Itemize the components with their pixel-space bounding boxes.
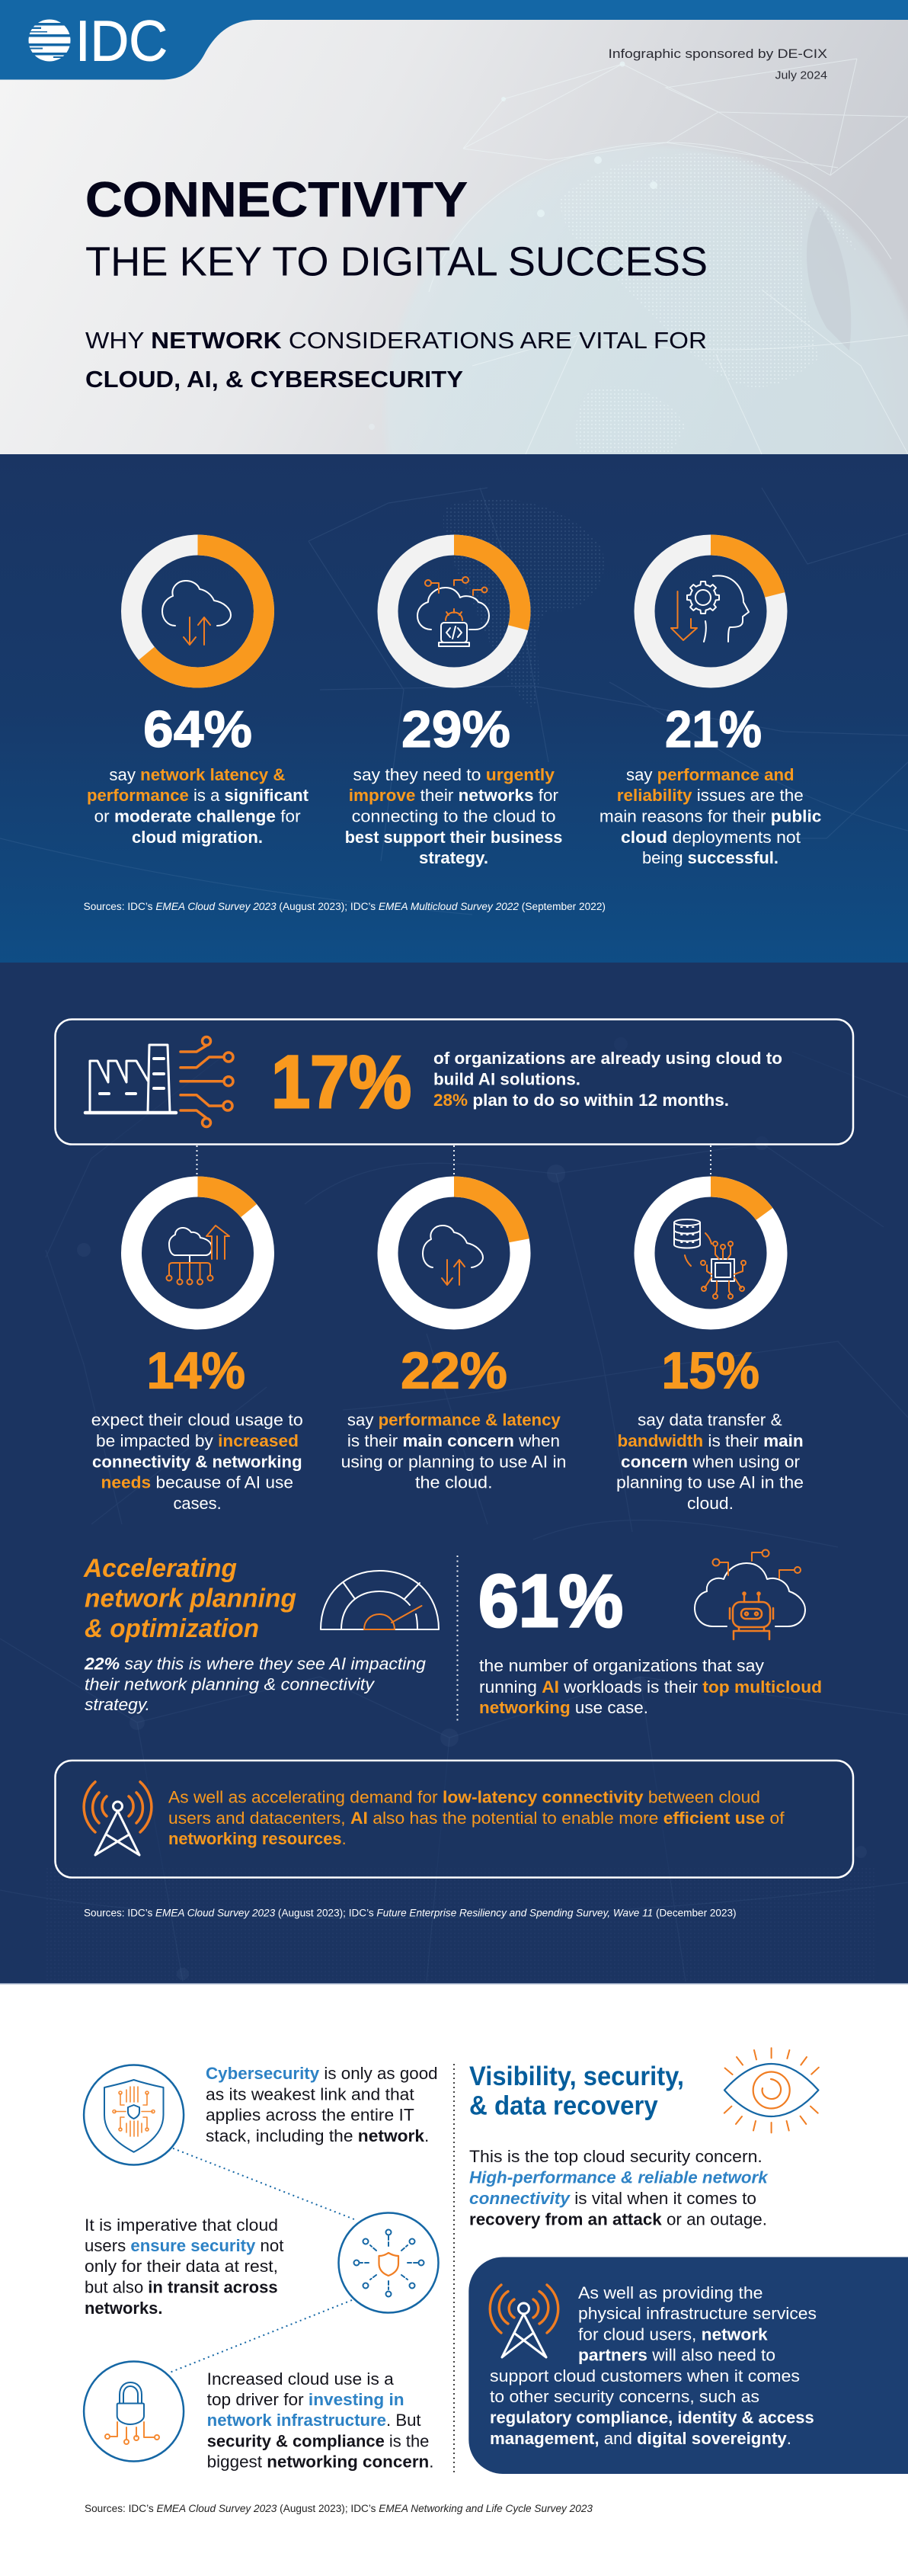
- text: weakest link: applies across the entire IT: [206, 2105, 414, 2124]
- title: CONNECTIVITY: [85, 171, 468, 227]
- block: 61% multicloud: the number of organizations that say: [479, 1656, 764, 1675]
- subtitle: [85, 327, 707, 392]
- text: top cloud security concern: connectivity is vital when it comes to: [469, 2189, 756, 2208]
- callout: network partners: regulatory compliance, identity & access: [490, 2408, 814, 2427]
- block: accelerating network planning: strategy.: [85, 1695, 150, 1714]
- stat: 64%: say network latency &: [109, 765, 286, 784]
- icon: cloud with code laptop: [417, 577, 489, 646]
- text: ensure security: networks.: [85, 2299, 163, 2318]
- stat: 15%: concern when using or: [621, 1452, 800, 1471]
- donut: 64%: [131, 545, 264, 678]
- text: ensure security: It is imperative that cloud: [85, 2216, 278, 2235]
- text: weakest link: as its weakest link and that: [206, 2085, 414, 2103]
- callout: network partners: As well as providing the: [578, 2283, 763, 2302]
- subtitle: CLOUD, AI, & CYBERSECURITY: [85, 366, 463, 392]
- callout: network partners: to other security concerns, such as: [490, 2387, 759, 2406]
- text: ensure security: users ensure security not: [85, 2236, 283, 2255]
- icon: cloud with robot: [695, 1550, 805, 1639]
- callout: low-latency connectivity: [55, 1761, 853, 1878]
- text: investing in network infrastructure: network infrastructure. But: [207, 2411, 421, 2430]
- callout: 17% building AI solutions: 17%: [271, 1040, 411, 1123]
- header background with globe: [0, 0, 908, 690]
- callout: low-latency connectivity: networking resources.: [168, 1829, 347, 1848]
- stat: 22%: say performance & latency: [347, 1411, 561, 1430]
- icon: cloud with network nodes: [166, 1226, 229, 1285]
- sources: cloud statistics: Sources: IDC’s EMEA Cloud Survey 2023 (August 2023); IDC’s EMEA Multicloud Survey 2022 (September 2022): [84, 901, 606, 912]
- heading: visibility, security and data recovery: Visibility, security,: [469, 2062, 684, 2091]
- heading: visibility, security and data recovery: [469, 2062, 684, 2121]
- stat: 14%: cases.: [174, 1494, 222, 1513]
- subtitle: WHY NETWORK CONSIDERATIONS ARE VITAL FOR: [85, 327, 707, 354]
- stat: 64%: cloud migration.: [132, 828, 263, 847]
- icon: database and chip: [674, 1219, 746, 1299]
- callout: network partners: [468, 2257, 908, 2474]
- stat: 15%: planning to use AI in the: [616, 1473, 804, 1492]
- callout: low-latency connectivity: As well as accelerating demand for low-latency connectivity between cloud: [168, 1788, 760, 1807]
- callout: 17% building AI solutions: 28% plan to do so within 12 months.: [433, 1091, 729, 1110]
- callout: network partners: physical infrastructure services: [578, 2304, 817, 2323]
- panel: cybersecurity: [0, 1985, 908, 2576]
- callout: 17% building AI solutions: of organizations are already using cloud to: [433, 1049, 782, 1068]
- icon: shield with circuit: [84, 2065, 184, 2164]
- stat: 22%: 22%: [401, 1341, 507, 1399]
- icon: eye: [724, 2048, 819, 2132]
- text: top cloud security concern: [469, 2147, 769, 2229]
- IDC logo: IDC: [75, 9, 168, 73]
- IDC header tab: [0, 0, 908, 79]
- donut: 21%: [644, 545, 777, 678]
- stat: 64%: or moderate challenge for: [94, 806, 301, 826]
- stat: 29%: [345, 700, 562, 867]
- sponsor note: July 2024: [775, 69, 827, 82]
- callout: network partners: for cloud users, network: [578, 2325, 768, 2344]
- stat: 22%: [341, 1341, 567, 1492]
- icon: cloud with up and down arrows: [162, 581, 231, 645]
- icon: antenna: [490, 2285, 558, 2357]
- text: weakest link: [206, 2064, 438, 2145]
- block: 61% multicloud: 61%: [478, 1559, 623, 1642]
- stat: 29%: improve their networks for: [349, 786, 558, 805]
- icon: cloud with up and down arrows: [423, 1226, 483, 1285]
- sponsor note: [608, 46, 827, 82]
- stat: 14%: 14%: [146, 1341, 245, 1399]
- text: ensure security: but also in transit across: [85, 2278, 278, 2297]
- stat: 14%: [91, 1341, 303, 1513]
- callout: 17% building AI solutions: build AI solutions.: [433, 1070, 580, 1089]
- sources: cybersecurity: Sources: IDC’s EMEA Cloud Survey 2023 (August 2023); IDC’s EMEA Networking and Life Cycle Survey 2023: [85, 2503, 593, 2514]
- stat: 22%: using or planning to use AI in: [341, 1452, 567, 1471]
- block: 61% multicloud: running AI workloads is their top multicloud: [479, 1677, 822, 1697]
- donut: 22%: [388, 1187, 520, 1319]
- callout: network partners: partners will also need to: [578, 2346, 775, 2364]
- icon: gauge: [321, 1571, 439, 1629]
- stat: 15%: 15%: [661, 1341, 759, 1399]
- stat: 29%: strategy.: [419, 848, 488, 867]
- sponsor note: Infographic sponsored by DE-CIX: [608, 46, 827, 61]
- stat: 14%: needs because of AI use: [101, 1473, 293, 1492]
- stat: 29%: connecting to the cloud to: [352, 806, 556, 826]
- IDC logo: [27, 9, 168, 73]
- text: investing in network infrastructure: Increased cloud use is a: [207, 2369, 395, 2389]
- callout: low-latency connectivity: users and datacenters, AI also has the potential to enable more efficient use of: [168, 1809, 785, 1828]
- stat: 14%: be impacted by increased: [96, 1431, 299, 1450]
- title: [85, 171, 708, 285]
- donut: 29%: [388, 545, 520, 678]
- text: ensure security: only for their data at rest,: [85, 2257, 278, 2276]
- stat: 21%: [599, 700, 821, 867]
- heading: visibility, security and data recovery: & data recovery: [469, 2091, 658, 2121]
- stat: 29%: say they need to urgently: [353, 765, 555, 784]
- stat: 22%: the cloud.: [415, 1473, 493, 1492]
- stat: 64%: [87, 700, 309, 847]
- block: accelerating network planning: [83, 1554, 439, 1714]
- stat: 21%: 21%: [665, 700, 762, 758]
- stat: 21%: reliability issues are the: [617, 786, 804, 805]
- text: investing in network infrastructure: biggest networking concern.: [207, 2453, 433, 2471]
- icon: padlock: [84, 2361, 184, 2462]
- icon: factory with circuit lines: [85, 1036, 233, 1126]
- icon: shield with spokes: [338, 2213, 439, 2312]
- text: top cloud security concern: This is the top cloud security concern.: [469, 2147, 763, 2166]
- callout: 17% building AI solutions: [55, 1020, 853, 1145]
- stat: 15%: [616, 1341, 804, 1513]
- icon: head with gear and down arrows: [671, 575, 749, 642]
- block: accelerating network planning: 22% say this is where they see AI impacting: [84, 1655, 427, 1674]
- donut: 15%: [644, 1187, 777, 1319]
- stat: 64%: performance is a significant: [87, 786, 309, 805]
- panel: cloud connectivity statistics: [0, 454, 908, 963]
- stat: 21%: cloud deployments not: [621, 828, 801, 847]
- panel: AI statistics: [0, 963, 908, 1985]
- icon: antenna: [84, 1782, 152, 1855]
- block: 61% multicloud: networking use case.: [479, 1698, 648, 1717]
- stat: 29%: best support their business: [345, 828, 562, 847]
- callout: network partners: support cloud customers when it comes: [490, 2366, 800, 2385]
- text: investing in network infrastructure: security & compliance is the: [207, 2432, 429, 2451]
- stat: 15%: bandwidth is their main: [617, 1431, 804, 1450]
- callout: network partners: management, and digital sovereignty.: [490, 2429, 791, 2448]
- stat: 22%: is their main concern when: [347, 1431, 560, 1450]
- stat: 14%: connectivity & networking: [92, 1452, 302, 1471]
- text: top cloud security concern: recovery from an attack or an outage.: [469, 2210, 767, 2229]
- stat: 21%: being successful.: [642, 848, 779, 867]
- stat: 21%: say performance and: [626, 765, 794, 784]
- text: weakest link: Cybersecurity is only as good: [206, 2064, 438, 2083]
- block: accelerating network planning: Accelerating: [83, 1554, 237, 1583]
- stat: 29%: 29%: [401, 700, 510, 758]
- text: ensure security: [85, 2216, 283, 2318]
- stat: 21%: main reasons for their public: [599, 806, 821, 826]
- text: top cloud security concern: High-performance & reliable network: [469, 2167, 769, 2187]
- block: 61% multicloud: [478, 1550, 822, 1717]
- stat: 15%: say data transfer &: [638, 1411, 782, 1430]
- block: accelerating network planning: & optimization: [85, 1614, 259, 1643]
- text: investing in network infrastructure: top driver for investing in: [207, 2390, 404, 2409]
- text: investing in network infrastructure: [207, 2369, 433, 2471]
- title: THE KEY TO DIGITAL SUCCESS: [85, 239, 708, 285]
- text: weakest link: stack, including the network.: [206, 2126, 429, 2145]
- stat: 15%: cloud.: [687, 1494, 734, 1513]
- stat: 14%: expect their cloud usage to: [91, 1411, 303, 1430]
- block: accelerating network planning: network planning: [85, 1584, 296, 1613]
- block: accelerating network planning: their network planning & connectivity: [85, 1675, 376, 1693]
- stat: 64%: 64%: [143, 700, 252, 758]
- sources: AI statistics: Sources: IDC’s EMEA Cloud Survey 2023 (August 2023); IDC’s Future Enterprise Resiliency and Spending Survey, Wave 11 (December 2023): [84, 1907, 737, 1919]
- donut: 14%: [131, 1187, 264, 1319]
